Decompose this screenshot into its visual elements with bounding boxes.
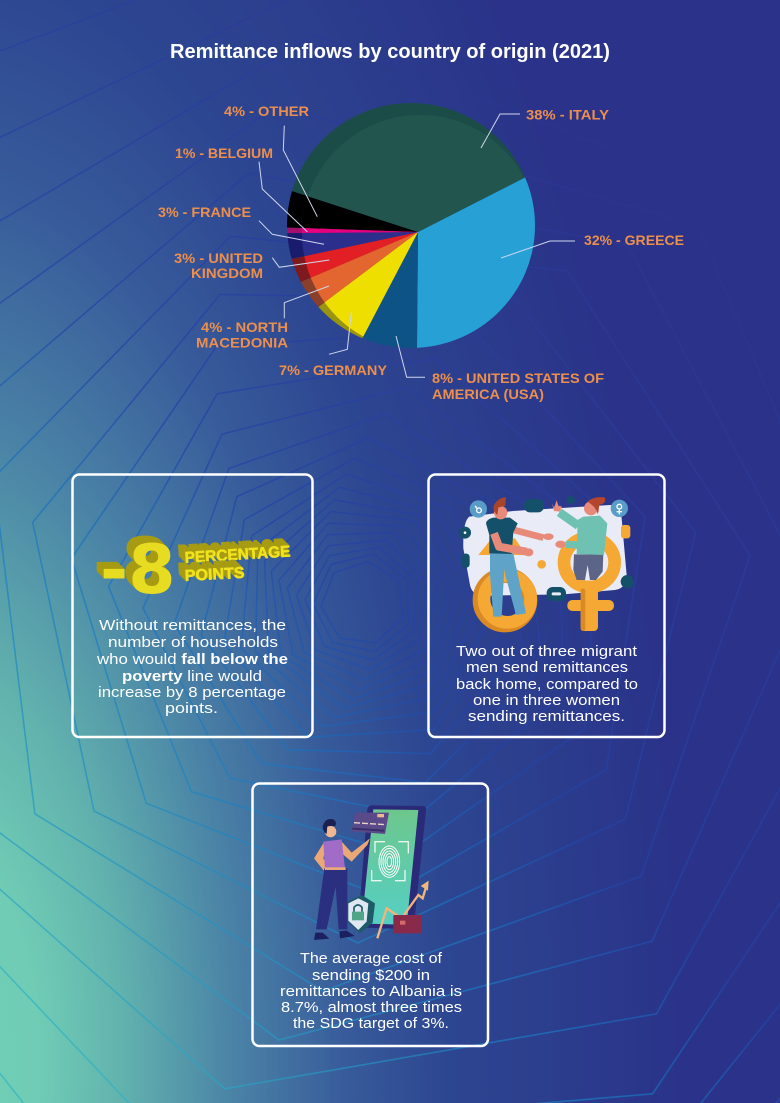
panel: poverty — [72, 474, 312, 737]
text: poverty: who would fall below the — [96, 651, 288, 668]
text: poverty: Without remittances, the — [99, 617, 286, 634]
text: gender: back home, compared to — [456, 676, 638, 693]
icon: minus 8 percentage points: -8 — [100, 531, 176, 610]
pie labels: 4% - NORTH — [201, 319, 288, 335]
text: cost: the SDG target of 3%. — [293, 1015, 449, 1032]
title: Remittance inflows by country of origin (2021) — [170, 41, 610, 63]
text: cost: remittances to Albania is — [280, 983, 462, 1000]
text: cost: The average cost of — [300, 950, 443, 967]
leader lines — [259, 114, 575, 377]
text: poverty: points. — [165, 700, 218, 717]
pie labels: AMERICA (USA) — [432, 386, 544, 402]
pie labels: 32% - GREECE — [584, 232, 684, 248]
text: gender: one in three women — [473, 692, 620, 709]
text: gender: men send remittances — [466, 659, 628, 676]
pie chart — [287, 103, 535, 348]
text: poverty: increase by 8 percentage — [98, 684, 286, 701]
text: gender: Two out of three migrant — [456, 643, 638, 660]
text: cost — [280, 950, 462, 1032]
text: gender: sending remittances. — [468, 708, 625, 725]
pie labels: 3% - UNITED — [174, 250, 263, 266]
icon: minus 8 percentage points: PERCENTAGE — [184, 544, 291, 567]
pie labels: 7% - GERMANY — [279, 362, 388, 378]
pie labels: KINGDOM — [191, 265, 263, 281]
pie labels: 8% - UNITED STATES OF — [432, 370, 604, 386]
text: gender — [456, 643, 638, 725]
text: cost: sending $200 in — [312, 967, 430, 984]
pie labels: MACEDONIA — [196, 334, 288, 350]
panel: gender — [428, 474, 664, 737]
pie labels — [158, 103, 684, 402]
pie labels: 38% - ITALY — [526, 106, 610, 122]
icon: minus 8 percentage points: POINTS — [184, 565, 245, 585]
text: poverty — [96, 617, 288, 717]
text: cost: 8.7%, almost three times — [281, 999, 462, 1016]
pie labels: 3% - FRANCE — [158, 204, 251, 220]
text: poverty: poverty line would — [122, 668, 262, 685]
icon: minus 8 percentage points — [100, 531, 291, 610]
pie labels: 1% - BELGIUM — [175, 145, 273, 161]
illustration: person with phone and card — [314, 805, 429, 940]
illustration: man and woman with gender symbols — [459, 496, 634, 631]
text: poverty: number of households — [108, 634, 278, 651]
panel: cost — [252, 784, 488, 1046]
pie labels: 4% - OTHER — [224, 103, 309, 119]
